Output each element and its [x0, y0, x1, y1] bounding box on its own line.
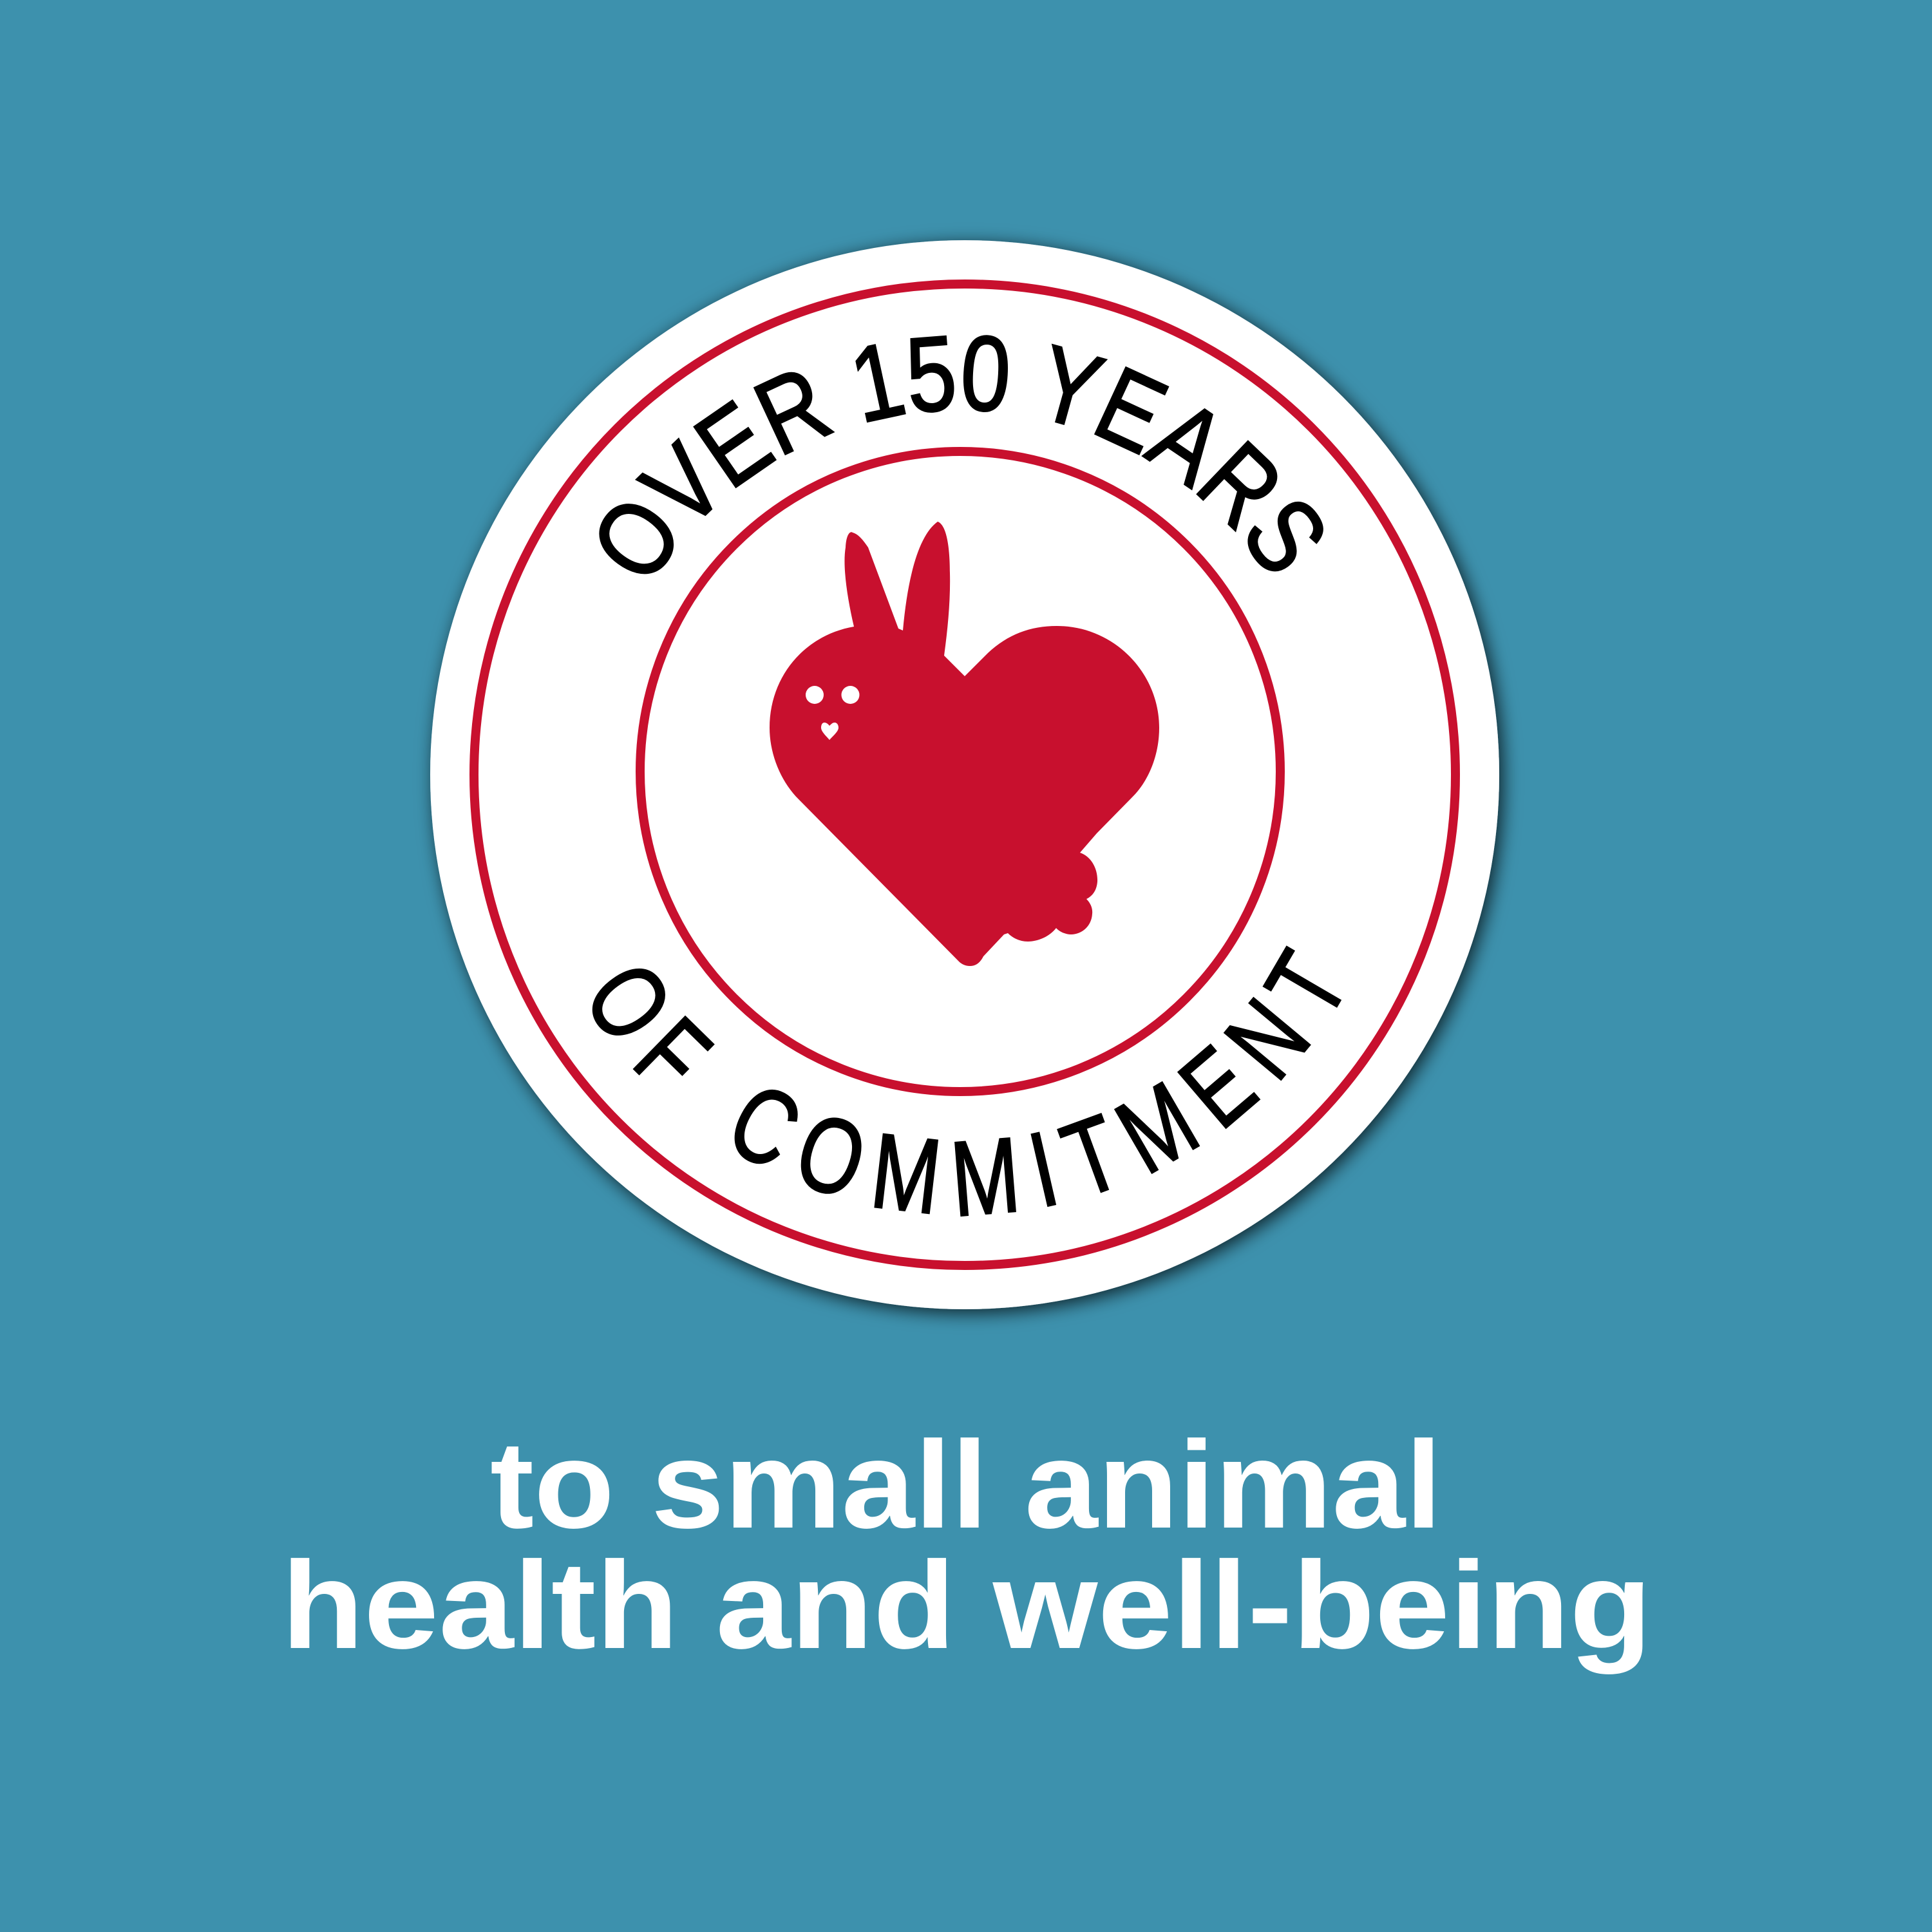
nose	[821, 723, 838, 740]
rabbit heart silhouette	[770, 522, 1159, 966]
inner red ring	[640, 451, 1280, 1092]
badge	[421, 231, 1516, 1327]
badge white disc	[430, 240, 1499, 1309]
outer red ring	[474, 284, 1455, 1265]
left eye	[806, 686, 824, 704]
icon: rabbit heart	[770, 522, 1159, 966]
right eye	[841, 686, 859, 704]
caption line 2: health and well-being	[281, 1535, 1652, 1674]
caption line 1: to small animal	[490, 1415, 1442, 1554]
curved text: over 150 years: OVER 150 YEARS	[599, 335, 1323, 574]
caption	[281, 1415, 1652, 1674]
curved text: of commitment: OF COMMITMENT	[592, 945, 1342, 1217]
